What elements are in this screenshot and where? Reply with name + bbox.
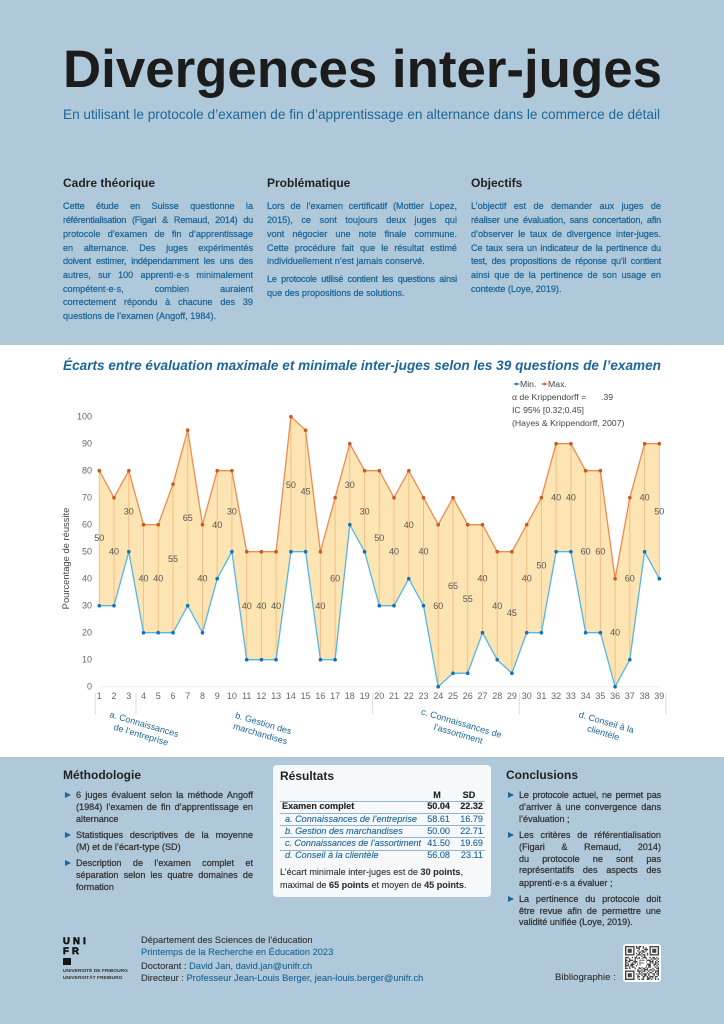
difference labels [94, 480, 664, 638]
category label c: c. Connaissances de [420, 707, 503, 740]
bullet list: méthodologie: Description de l’examen complet et [76, 858, 253, 868]
category label d: clientèle [586, 723, 621, 742]
text block: cadre théorique: correctement répondu à chacune des 39 [63, 297, 253, 307]
difference labels: 40 [418, 547, 429, 557]
panel: conclusions [506, 768, 662, 928]
text block: cadre théorique: compétent·e·s, combien auraient [63, 284, 253, 294]
difference labels: 40 [315, 601, 325, 611]
chart title: Écarts entre évaluation maximale et minimale inter-juges selon les 39 questions de l’examen [63, 358, 661, 373]
difference labels: 50 [536, 561, 546, 571]
difference labels: 40 [242, 601, 252, 611]
legend and Krippendorff statistics: Max. [548, 379, 567, 389]
text block: objectifs [471, 201, 662, 294]
x axis labels: 7 [185, 691, 190, 701]
bullet list: conclusions: d’arriver à une convergence dans [519, 802, 661, 812]
results table: M [433, 790, 441, 800]
logo: université de Fribourg: UNIVERSITÄT FREIBURG [63, 976, 123, 980]
series: maximum [99, 417, 659, 579]
results table: 50.00 [427, 826, 450, 836]
x axis labels: 22 [404, 691, 414, 701]
y axis labels [77, 412, 92, 692]
x axis labels: 10 [227, 691, 237, 701]
title: En utilisant le protocole d’examen de fin d’apprentissage en alternance dans le commerce de détail [63, 107, 660, 122]
results note: L’écart minimale inter-juges est de 30 points, [280, 867, 463, 877]
difference labels: 40 [197, 574, 208, 584]
bullet list: méthodologie: séparation selon les quatre domaines de [76, 870, 253, 880]
heading: conclusions: Conclusions [506, 768, 578, 782]
x axis labels: 8 [200, 691, 205, 701]
heading: objectifs: Objectifs [471, 176, 522, 190]
results table: 19.69 [460, 838, 483, 848]
difference labels: 50 [654, 507, 664, 517]
x axis labels: 2 [111, 691, 117, 701]
text block: objectifs: ainsi que de la pertinence de son usage en [471, 270, 661, 280]
text block: objectifs: test, des propositions de réponse qu’il contient [471, 256, 661, 266]
x axis labels: 28 [492, 691, 502, 701]
text block: problématique: vont négocier une note finale commune. [267, 229, 457, 239]
legend and Krippendorff statistics: Min. [520, 379, 536, 389]
x axis labels: 32 [551, 691, 561, 701]
x axis labels: 26 [463, 691, 473, 701]
results table: 58.61 [427, 814, 450, 824]
text block: objectifs: d’observer le taux de divergence inter-juges. [471, 229, 661, 239]
results table: Examen complet [282, 801, 354, 811]
panel: méthodologie [63, 768, 254, 892]
legend and Krippendorff statistics: IC 95% [0.32;0.45] [512, 405, 584, 415]
x axis labels: 38 [640, 691, 650, 701]
x axis labels: 1 [97, 691, 102, 701]
logo: université de Fribourg: UNIVERSITÉ DE FRIBOURG [63, 969, 128, 974]
logo: université de Fribourg: UNI [63, 936, 89, 947]
title: Divergences inter-juges [63, 40, 662, 99]
y axis labels: 90 [82, 439, 92, 449]
category label a: a. Connaissances [108, 709, 180, 739]
y axis labels: 60 [82, 520, 92, 530]
x axis labels: 5 [156, 691, 161, 701]
bullet list: méthodologie: 6 juges évaluent selon la méthode Angoff [76, 790, 253, 800]
x axis labels: 18 [345, 691, 355, 701]
text block: objectifs: réaliser une évaluation, sans concertation, afin [471, 215, 661, 225]
difference labels: 30 [360, 507, 370, 517]
legend and Krippendorff statistics: (Hayes & Krippendorff, 2007) [512, 418, 624, 428]
heading: problématique: Problématique [267, 176, 350, 190]
results table: 22.71 [460, 826, 483, 836]
difference labels: 60 [581, 547, 591, 557]
difference labels: 40 [271, 601, 281, 611]
x axis labels: 25 [448, 691, 458, 701]
x axis labels: 33 [566, 691, 576, 701]
y axis labels: 0 [87, 682, 92, 692]
bullet list: conclusions: (Figari & Remaud, 2014) [519, 842, 661, 852]
results table: b. Gestion des marchandises [285, 826, 403, 836]
legend and Krippendorff statistics: α de Krippendorff = [512, 392, 586, 402]
text block: problématique: Le protocole utilisé contient les questions ainsi [267, 274, 457, 284]
baseline [99, 686, 660, 688]
x axis labels: 36 [610, 691, 620, 701]
difference labels: 40 [212, 520, 222, 530]
difference labels: 40 [477, 574, 488, 584]
results table: d. Conseil à la clientèle [285, 850, 379, 860]
difference labels: 40 [256, 601, 266, 611]
results table: 23.11 [461, 850, 483, 860]
legend and Krippendorff statistics: .39 [601, 392, 613, 402]
text block: cadre théorique: référentialisation (Figari & Remaud, 2014) du [63, 215, 253, 225]
legend and Krippendorff statistics [512, 379, 624, 428]
bullet list: conclusions: Les critères de référentialisation [519, 830, 661, 840]
x axis labels: 23 [418, 691, 429, 701]
text block: problématique: 2015), ce sont toujours deux juges qui [267, 215, 457, 225]
panel: résultats [273, 765, 491, 897]
x axis labels [97, 691, 664, 701]
text block: cadre théorique: autres, sur 100 apprenti·e·s minimalement [63, 270, 253, 280]
text block: problématique: Lors de l’examen certificatif (Mottier Lopez, [267, 201, 457, 211]
difference labels: 40 [389, 547, 399, 557]
y axis labels: 30 [82, 601, 92, 611]
difference labels: 40 [138, 574, 149, 584]
x axis labels: 20 [374, 691, 384, 701]
y axis labels: 20 [82, 628, 92, 638]
bullet list: conclusions: apprenti·e·s a évaluer ; [519, 878, 613, 888]
text block: cadre théorique: questions de l’examen (Angoff, 1984). [63, 311, 216, 321]
bullet list: conclusions [508, 790, 662, 928]
difference labels: 65 [448, 581, 458, 591]
difference labels: 65 [183, 513, 193, 523]
x axis labels: 16 [315, 691, 325, 701]
x axis labels: 24 [433, 691, 443, 701]
difference labels: 30 [345, 480, 355, 490]
category label b: marchandises [232, 721, 289, 747]
area between min and max [99, 417, 659, 687]
y axis labels: 80 [82, 466, 92, 476]
difference labels: 40 [404, 520, 414, 530]
difference labels: 60 [625, 574, 635, 584]
x axis labels: 3 [126, 691, 131, 701]
bullet list: conclusions: La pertinence du protocole doit [519, 894, 661, 904]
x axis labels: 21 [389, 691, 399, 701]
difference labels: 40 [640, 493, 650, 503]
x axis labels: 13 [271, 691, 281, 701]
x axis labels: 34 [581, 691, 591, 701]
difference labels: 40 [492, 601, 502, 611]
category label b [231, 710, 293, 747]
text block: objectifs: contexte (Loye, 2019). [471, 284, 562, 294]
bullet list: méthodologie: formation [76, 882, 114, 892]
results table: a. Connaissances de l’entreprise [285, 814, 417, 824]
difference labels: 40 [610, 628, 620, 638]
y axis labels: 100 [77, 412, 92, 422]
text block: cadre théorique [63, 201, 254, 322]
results table: 16.79 [460, 814, 483, 824]
x axis labels: 29 [507, 691, 517, 701]
bullet list: conclusions: validité unifiée (Loye, 2019). [519, 917, 633, 927]
x axis labels: 39 [654, 691, 664, 701]
difference labels: 40 [522, 574, 532, 584]
footer: affiliation and contacts: Directeur : Professeur Jean-Louis Berger, jean-louis.berger@unifr.ch [141, 973, 423, 983]
difference labels: 60 [433, 601, 443, 611]
text block: problématique: que des propositions de solutions. [267, 288, 405, 298]
text block: cadre théorique: Cette étude en Suisse questionne la [63, 201, 253, 211]
bullet list: méthodologie: (1984) l’examen de fin d’apprentissage en [76, 802, 253, 812]
x axis labels: 4 [141, 691, 146, 701]
difference labels: 55 [168, 554, 178, 564]
x axis labels: 35 [595, 691, 605, 701]
results table: SD [463, 790, 475, 800]
icon: QR code [623, 944, 661, 982]
results table: c. Connaissances de l’assortiment [285, 838, 421, 848]
text block: problématique [266, 201, 457, 298]
difference labels: 30 [124, 507, 134, 517]
y axis labels: 10 [82, 655, 92, 665]
x axis labels: 31 [536, 691, 546, 701]
bullet list: conclusions: du protocole ne sont pas [519, 854, 661, 864]
results note [280, 867, 467, 890]
x axis labels: 37 [625, 691, 635, 701]
difference labels: 50 [286, 480, 296, 490]
x axis labels: 11 [242, 691, 251, 701]
results table: 56.08 [427, 850, 450, 860]
x axis labels: 30 [522, 691, 532, 701]
y axis title: Pourcentage de réussite [60, 508, 71, 609]
x axis labels: 15 [301, 691, 311, 701]
x axis labels: 14 [286, 691, 296, 701]
text block: problématique: Cette procédure fait que le résultat estimé [267, 243, 457, 253]
text block: objectifs: Ce taux sera un indicateur de la pertinence du [471, 243, 661, 253]
category label b: b. Gestion des [234, 710, 293, 736]
bullet list: conclusions: l’évaluation ; [519, 814, 570, 824]
category label d: d. Conseil à la [578, 709, 635, 735]
text block: problématique: individuellement n’est jamais conservé. [267, 256, 425, 266]
difference labels: 55 [463, 594, 473, 604]
logo: université de Fribourg: FR [63, 946, 82, 957]
x axis labels: 17 [330, 691, 340, 701]
panel: problématique [266, 176, 457, 298]
y axis labels: 40 [82, 574, 92, 584]
difference labels: 60 [330, 574, 340, 584]
text block: cadre théorique: doivent estimer, indépendamment les uns des [63, 256, 253, 266]
series: minimum [99, 525, 659, 687]
bullet list: méthodologie: alternance [76, 814, 118, 824]
x axis labels: 12 [256, 691, 266, 701]
x axis labels: 9 [215, 691, 220, 701]
panel: chart band [0, 345, 724, 757]
results table: 22.32 [460, 801, 483, 811]
difference labels: 40 [109, 547, 119, 557]
difference labels: 50 [374, 533, 384, 543]
x axis labels: 19 [360, 691, 370, 701]
difference labels: 45 [507, 608, 517, 618]
footer: affiliation and contacts: Doctorant : David Jan, david.jan@unifr.ch [141, 961, 312, 971]
difference labels: 40 [153, 574, 163, 584]
bullet list: conclusions: représentatifs des aspects des [519, 865, 661, 875]
y axis labels: 70 [82, 493, 92, 503]
category label d [575, 709, 635, 746]
category label c: l’assortiment [433, 722, 484, 746]
bullet list: méthodologie: (M) et de l’écart-type (SD) [76, 842, 181, 852]
bullet list: conclusions: Le protocole actuel, ne permet pas [519, 790, 661, 800]
results table [280, 790, 485, 860]
difference labels: 45 [301, 487, 311, 497]
logo: université de Fribourg [63, 936, 128, 980]
difference labels: 50 [94, 533, 104, 543]
footer: affiliation and contacts: Printemps de la Recherche en Éducation 2023 [141, 947, 333, 957]
footer: affiliation and contacts [141, 935, 423, 983]
results table: 41.50 [427, 838, 450, 848]
results table: 50.04 [427, 801, 450, 811]
text block: objectifs: L’objectif est de demander aux juges de [471, 201, 661, 211]
category label a: de l’entreprise [112, 722, 170, 748]
high-low lines [99, 417, 659, 687]
y axis labels: 50 [82, 547, 92, 557]
text block: cadre théorique: en alternance. Des juges expérimentés [63, 243, 253, 253]
difference labels: 60 [595, 547, 605, 557]
x axis labels: 27 [477, 691, 488, 701]
difference labels: 30 [227, 507, 237, 517]
heading: résultats: Résultats [280, 769, 334, 783]
results note: maximal de 65 points et moyen de 45 points. [280, 880, 467, 890]
heading: cadre théorique: Cadre théorique [63, 176, 155, 190]
panel: objectifs [471, 176, 662, 294]
bullet list: conclusions: être revue afin de permettre une [519, 906, 661, 916]
bullet list: méthodologie [65, 790, 254, 892]
heading: méthodologie: Méthodologie [63, 768, 141, 782]
difference labels: 40 [566, 493, 576, 503]
bullet list: méthodologie: Statistiques descriptives de la moyenne [76, 830, 253, 840]
footer: affiliation and contacts: Département des Sciences de l’éducation [141, 935, 313, 945]
difference labels: 40 [551, 493, 561, 503]
bibliography label: Bibliographie : [555, 972, 616, 983]
panel: cadre théorique [63, 176, 254, 322]
text block: cadre théorique: protocole d’examen de fin d’apprentissage [63, 229, 253, 239]
x axis labels: 6 [170, 691, 176, 701]
